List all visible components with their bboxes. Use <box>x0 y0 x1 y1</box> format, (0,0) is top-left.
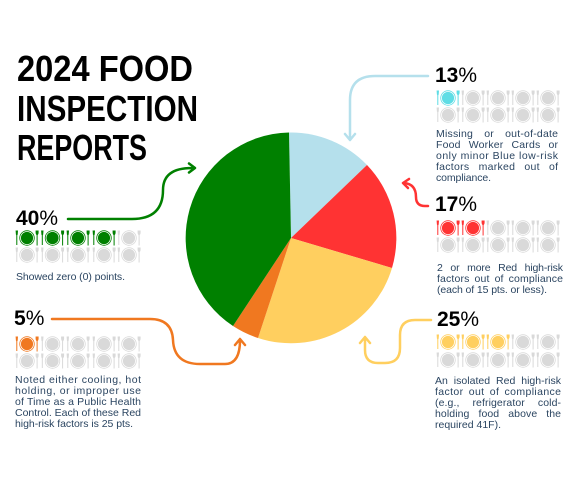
text 17: factors out of compliance <box>437 273 563 285</box>
text 13: Missing or out-of-date <box>436 128 558 140</box>
text 25: (e.g., refrigerator cold- <box>435 397 562 409</box>
arrow: yellow <box>360 320 431 363</box>
text 5 <box>15 374 141 430</box>
text 25: required 41F). <box>435 419 501 431</box>
arrow: green <box>68 164 195 219</box>
percent 40: 40% <box>16 207 58 230</box>
arrow: red <box>403 179 428 206</box>
plates 40 <box>16 230 141 263</box>
panel: 25 percent <box>435 308 562 431</box>
panel: 40 percent <box>16 207 141 283</box>
plates 5 <box>16 336 141 369</box>
text 5: Control. Each of these Red <box>15 407 141 419</box>
text 13: compliance. <box>436 172 491 184</box>
panel: 17 percent <box>435 193 564 296</box>
panel: 13 percent <box>435 64 560 184</box>
title: 2024 FOOD <box>17 48 193 89</box>
text 25: factor out of compliance <box>435 386 561 398</box>
plates 25 <box>437 334 560 368</box>
text 17: (each of 15 pts. or less). <box>437 284 547 296</box>
text 13: only minor Blue low-risk <box>436 150 559 162</box>
percent 13: 13% <box>435 64 477 87</box>
plates 17 <box>437 220 560 253</box>
percent 17: 17% <box>435 193 477 216</box>
arrow: blue <box>345 76 428 140</box>
text 40: Showed zero (0) points. <box>16 271 125 283</box>
text 13: factors marked out of <box>436 161 558 173</box>
arrow: orange <box>52 319 245 364</box>
panel: 5 percent <box>14 307 141 430</box>
text 25: holding food above the <box>435 408 561 420</box>
text 13 <box>436 128 559 184</box>
pie chart <box>186 132 396 343</box>
text 13: Food Worker Cards or <box>436 139 558 151</box>
title: REPORTS <box>17 127 147 168</box>
text 5: high-risk factors is 25 pts. <box>15 418 133 430</box>
text 25 <box>435 375 562 431</box>
percent 5: 5% <box>14 307 44 330</box>
text 5: of Time as a Public Health <box>15 396 141 408</box>
title <box>17 48 198 168</box>
text 17: 2 or more Red high-risk <box>437 262 564 274</box>
text 25: An isolated Red high-risk <box>435 375 562 387</box>
text 17 <box>437 262 564 296</box>
title: INSPECTION <box>17 88 198 129</box>
text 5: Noted either cooling, hot <box>15 374 141 386</box>
text 5: holding, or improper use <box>15 385 141 397</box>
percent 25: 25% <box>437 308 479 331</box>
plates 13 <box>437 90 560 123</box>
